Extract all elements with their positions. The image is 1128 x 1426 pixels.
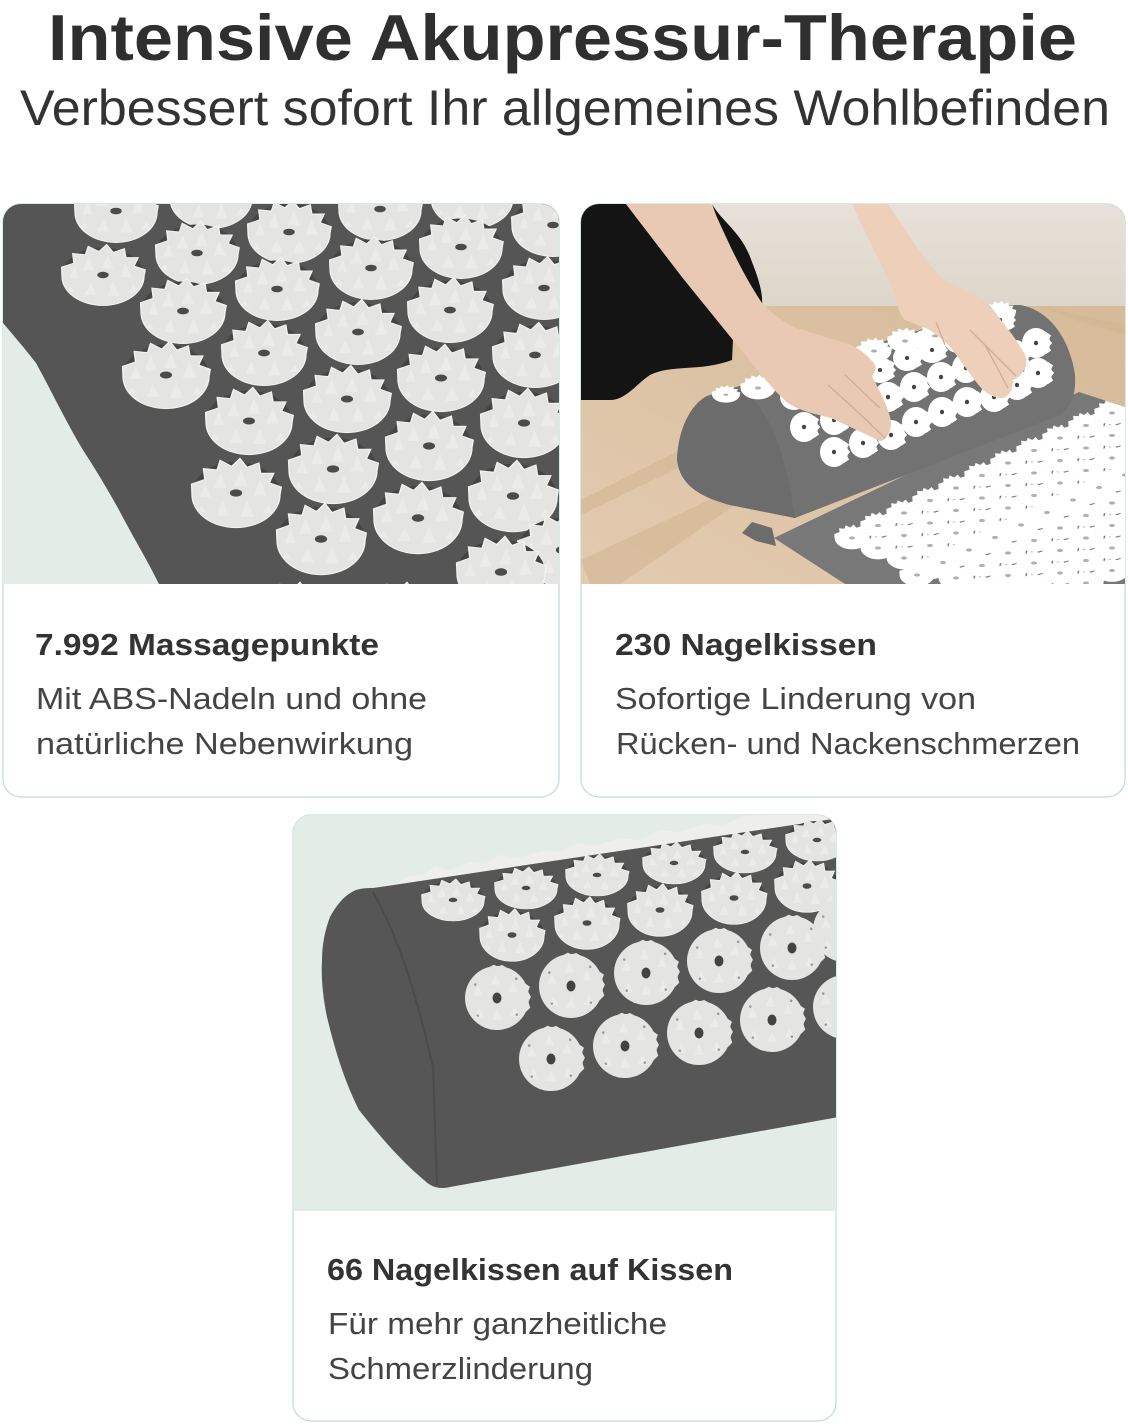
panel: 230 Nagelkissen — [581, 204, 1128, 797]
panel: 7.992 Massagepunkte — [2, 203, 560, 798]
card text — [36, 681, 427, 761]
card text: Schmerzlinderung — [328, 1351, 593, 1386]
title: Intensive Akupressur-Therapie — [48, 1, 1077, 74]
card heading: 230 Nagelkissen — [615, 627, 877, 662]
card heading: 7.992 Massagepunkte — [35, 627, 379, 662]
photo: close-up of acupressure mat — [3, 204, 559, 584]
panel: 66 Nagelkissen auf Kissen — [293, 815, 879, 1421]
photo: acupressure pillow — [293, 815, 879, 1211]
card text: Rücken- und Nackenschmerzen — [616, 726, 1080, 761]
card text: Mit ABS-Nadeln und ohne — [36, 681, 427, 716]
card frame — [581, 204, 1125, 797]
card text: natürliche Nebenwirkung — [36, 726, 413, 761]
card frame — [293, 815, 836, 1421]
card text: Für mehr ganzheitliche — [328, 1306, 667, 1341]
photo: hands on acupressure pillow and mat — [581, 204, 1128, 619]
card text — [328, 1306, 667, 1386]
card heading: 66 Nagelkissen auf Kissen — [327, 1252, 733, 1287]
card text: Sofortige Linderung von — [615, 681, 976, 716]
card text — [615, 681, 1080, 761]
subtitle: Verbessert sofort Ihr allgemeines Wohlbefinden — [20, 80, 1110, 136]
card frame — [3, 204, 559, 797]
